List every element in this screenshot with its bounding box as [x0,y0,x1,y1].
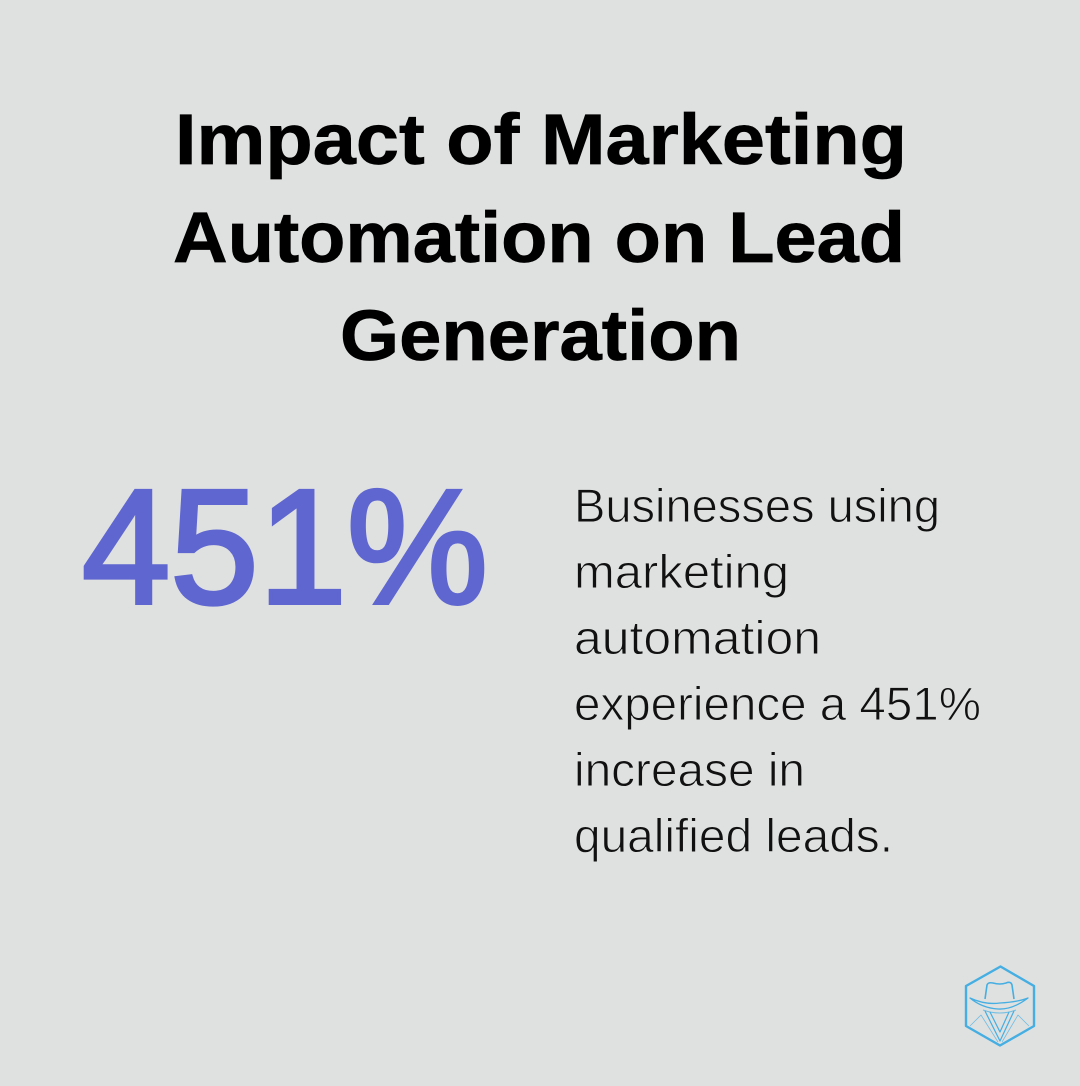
description text: marketing [574,545,789,598]
title: Automation on Lead [173,199,905,278]
description text: experience a 451% [574,677,981,730]
title: Generation [340,297,741,376]
description text [574,479,981,862]
big statistic: 451%: 451% [82,455,488,638]
description text: qualified leads. [574,809,893,862]
title [173,101,907,376]
icon: hexagon logo with hat and coat [966,966,1034,1046]
description text: automation [574,611,821,664]
title: Impact of Marketing [175,101,907,180]
description text: increase in [574,743,805,796]
description text: Businesses using [574,479,940,532]
